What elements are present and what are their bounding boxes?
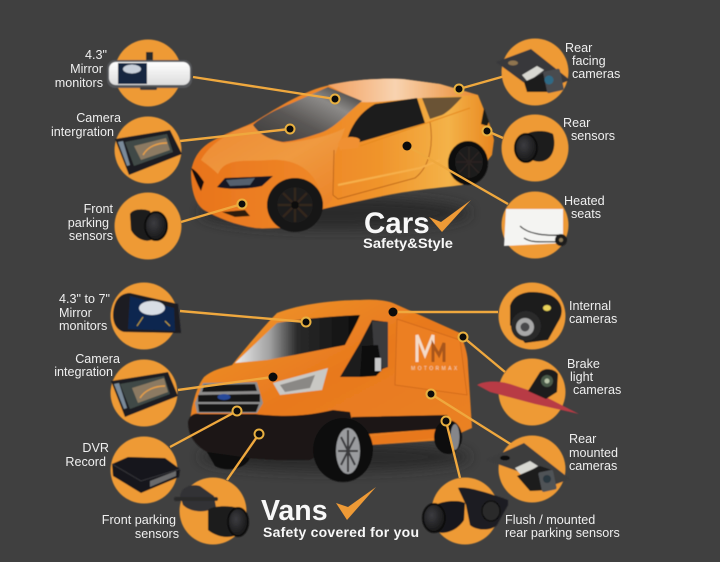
labels: van right: Rear xyxy=(569,432,596,446)
item: flush and mounted rear sensors xyxy=(423,478,508,544)
van sill and lower strip xyxy=(345,415,452,446)
labels: van left xyxy=(54,292,179,541)
car windshield xyxy=(253,87,362,142)
labels: van left: Mirror xyxy=(59,306,92,320)
callout lines: cars xyxy=(180,76,508,222)
callout dots: cars xyxy=(238,84,492,208)
van windshield xyxy=(235,315,360,363)
icon: cars check mark xyxy=(429,200,471,232)
labels: van left: monitors xyxy=(59,319,107,333)
labels: van right: light xyxy=(570,370,594,384)
labels: car left: intergration xyxy=(51,125,114,139)
labels: van right: mounted xyxy=(569,446,618,460)
labels: car right xyxy=(563,41,620,221)
labels: car right: sensors xyxy=(571,129,615,143)
labels: van left: integration xyxy=(54,365,113,379)
car door lines xyxy=(333,122,431,199)
van grille xyxy=(195,382,263,413)
van door logo: MOTORMAX xyxy=(411,366,460,372)
labels: van left: Camera xyxy=(75,352,120,366)
heading: vans: Vans xyxy=(261,495,328,527)
item: van internal camera xyxy=(498,282,566,350)
panel: vans xyxy=(54,282,621,544)
labels: van right: rear parking sensors xyxy=(505,526,620,540)
van headlight xyxy=(273,368,328,395)
illustration: orange car xyxy=(191,79,494,232)
van side window xyxy=(340,320,388,377)
labels: van right: Internal xyxy=(569,299,611,313)
labels: car right: Rear xyxy=(565,41,592,55)
labels: car left: sensors xyxy=(69,229,113,243)
labels: car left: Mirror xyxy=(70,62,103,76)
illustration: orange van xyxy=(188,300,472,482)
van rear wheel xyxy=(434,420,462,454)
item: heated seats xyxy=(502,192,568,258)
item: car front parking sensor xyxy=(114,192,182,260)
heading: cars xyxy=(363,207,453,251)
labels: van left: 4.3" to 7" xyxy=(59,292,110,306)
labels: car left xyxy=(51,48,121,243)
item: DVR recorder xyxy=(110,436,180,504)
labels: car left: 4.3" xyxy=(85,48,107,62)
van panel line xyxy=(395,319,467,395)
icon: vans check mark xyxy=(336,487,376,520)
van wing mirror xyxy=(360,345,382,377)
labels: car left: monitors xyxy=(55,76,103,90)
car wing mirror xyxy=(338,137,360,150)
labels: van right xyxy=(505,299,621,540)
labels: car right: facing xyxy=(572,54,606,68)
labels: car right: Heated xyxy=(564,194,605,208)
item: rear mounted camera xyxy=(486,436,570,502)
item: van camera integration xyxy=(110,360,178,426)
labels: car right: cameras xyxy=(572,67,620,81)
heading: cars: Safety&Style xyxy=(363,235,453,251)
item: car mirror monitor xyxy=(107,40,192,106)
van front tyre xyxy=(207,452,250,469)
item: van mirror monitor xyxy=(110,282,181,350)
car front intake xyxy=(191,168,204,191)
van bumper xyxy=(188,410,353,460)
labels: van right: cameras xyxy=(569,312,617,326)
labels: car left: Camera xyxy=(76,111,121,125)
labels: car right: Rear xyxy=(563,116,590,130)
heading: vans xyxy=(261,495,419,540)
van front wheel xyxy=(313,418,373,482)
labels: car left: Front xyxy=(84,202,113,216)
panel: cars xyxy=(51,38,620,260)
heading: cars: Cars xyxy=(364,207,430,240)
item: car rear facing camera xyxy=(496,38,570,106)
callout lines: vans xyxy=(170,311,512,480)
car roof highlight xyxy=(328,79,478,102)
labels: car right: seats xyxy=(571,207,601,221)
car rear wheel xyxy=(448,141,488,185)
labels: van right: Brake xyxy=(567,357,600,371)
labels: van left: Record xyxy=(65,455,106,469)
labels: van right: Flush / mounted xyxy=(505,513,595,527)
labels: van right: cameras xyxy=(569,459,617,473)
labels: van left: sensors xyxy=(135,527,179,541)
car side windows xyxy=(347,98,425,142)
van door logo xyxy=(411,335,460,372)
item: car camera integration xyxy=(114,116,182,184)
item: van front parking sensors xyxy=(174,478,248,544)
item: car rear sensor xyxy=(502,114,568,182)
callout dots: vans xyxy=(232,308,468,438)
labels: car left: parking xyxy=(68,216,109,230)
car front wheel xyxy=(267,178,323,232)
labels: van left: Front parking xyxy=(102,513,176,527)
heading: vans: Safety covered for you xyxy=(263,524,419,540)
labels: van right: cameras xyxy=(573,383,621,397)
labels: van left: DVR xyxy=(82,441,109,455)
item: brake light camera xyxy=(477,358,579,426)
car hood xyxy=(201,124,345,209)
